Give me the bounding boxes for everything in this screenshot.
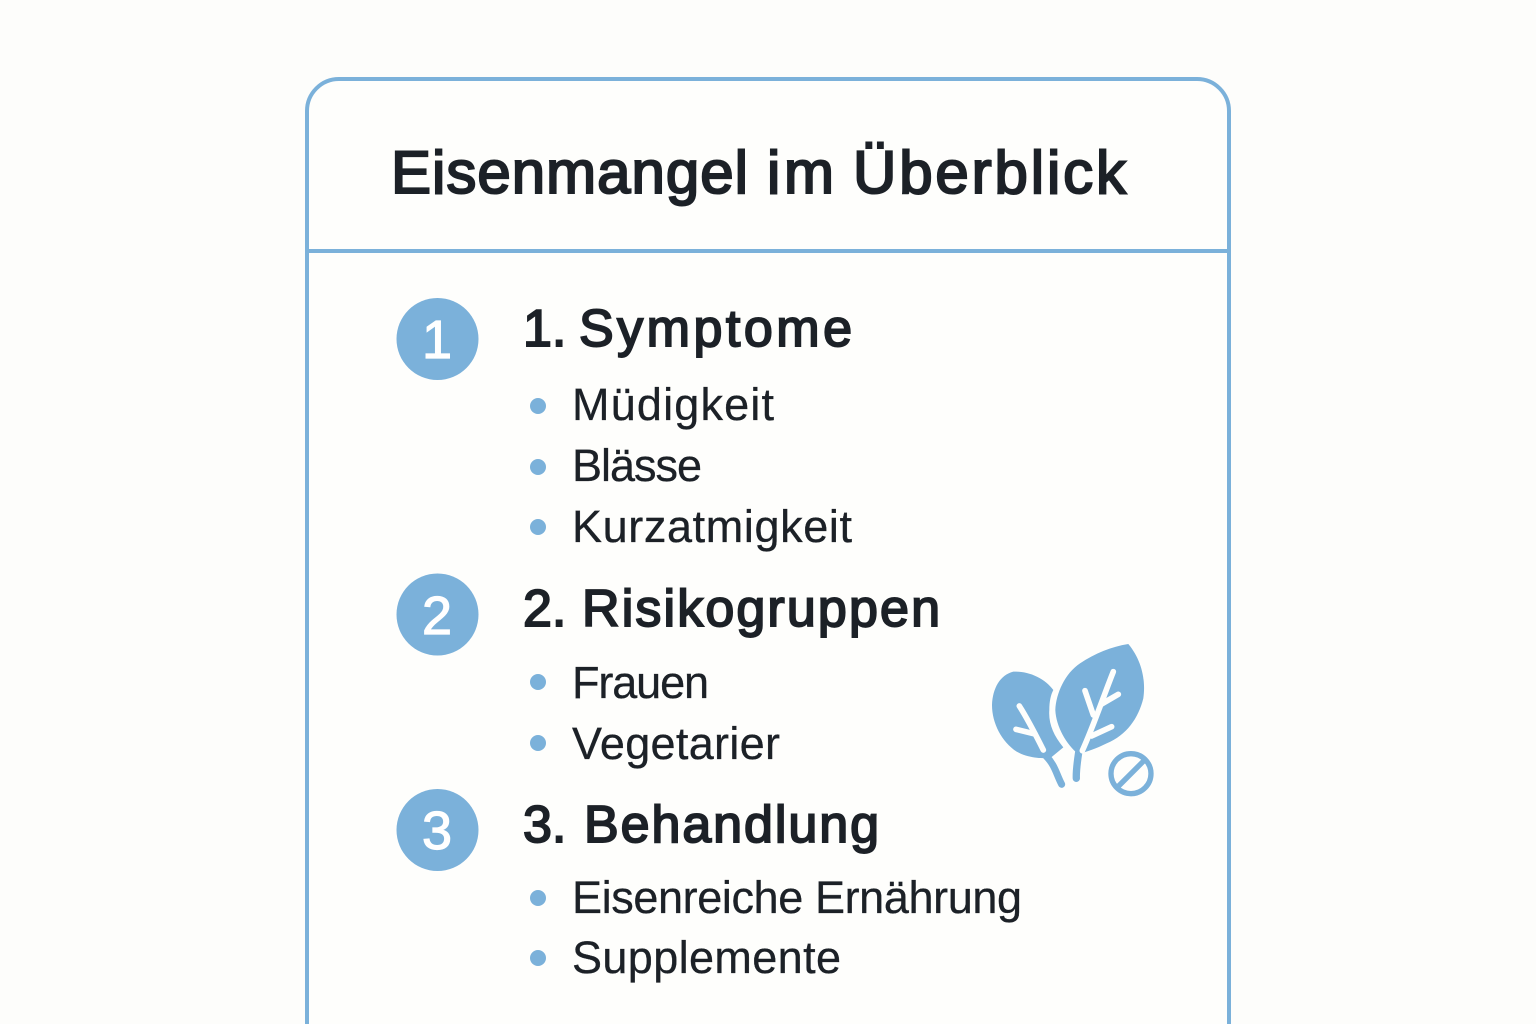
heading: Risikogruppen: 2. [523,580,566,638]
title [391,139,1127,206]
heading: Risikogruppen: Risikogruppen [582,580,940,638]
heading: Symptome: Symptome [579,300,852,358]
list: treatment: Eisenreiche Ernährung [572,872,1022,923]
number badge 1 [396,298,478,380]
list: treatment [530,872,1022,983]
list: risk groups [530,657,780,769]
number badge 1: 1 [422,310,452,370]
panel: overview card [307,79,1229,1024]
section 1: Symptome [396,298,852,552]
list: risk groups: Vegetarier [572,718,780,769]
heading: Behandlung: Behandlung [584,796,879,854]
number badge 2: 2 [422,586,452,646]
title: Überblick [853,139,1127,206]
list: symptoms: Müdigkeit [572,379,774,430]
section 2: Risikogruppen [396,574,940,769]
list: symptoms [530,379,852,552]
number badge 3: 3 [422,801,452,861]
list: symptoms: Blässe [572,440,702,491]
heading: Symptome: 1. [523,300,566,358]
list: risk groups: Frauen [572,657,709,708]
icon: leaves with prohibition sign [992,644,1151,794]
section 3: Behandlung [396,789,1022,983]
title: im [767,139,834,206]
number badge 2 [396,574,478,656]
title: Eisenmangel [391,139,748,206]
list: treatment: Supplemente [572,932,841,983]
list: symptoms: Kurzatmigkeit [572,501,852,552]
number badge 3 [396,789,478,871]
heading: Behandlung: 3. [523,796,566,854]
